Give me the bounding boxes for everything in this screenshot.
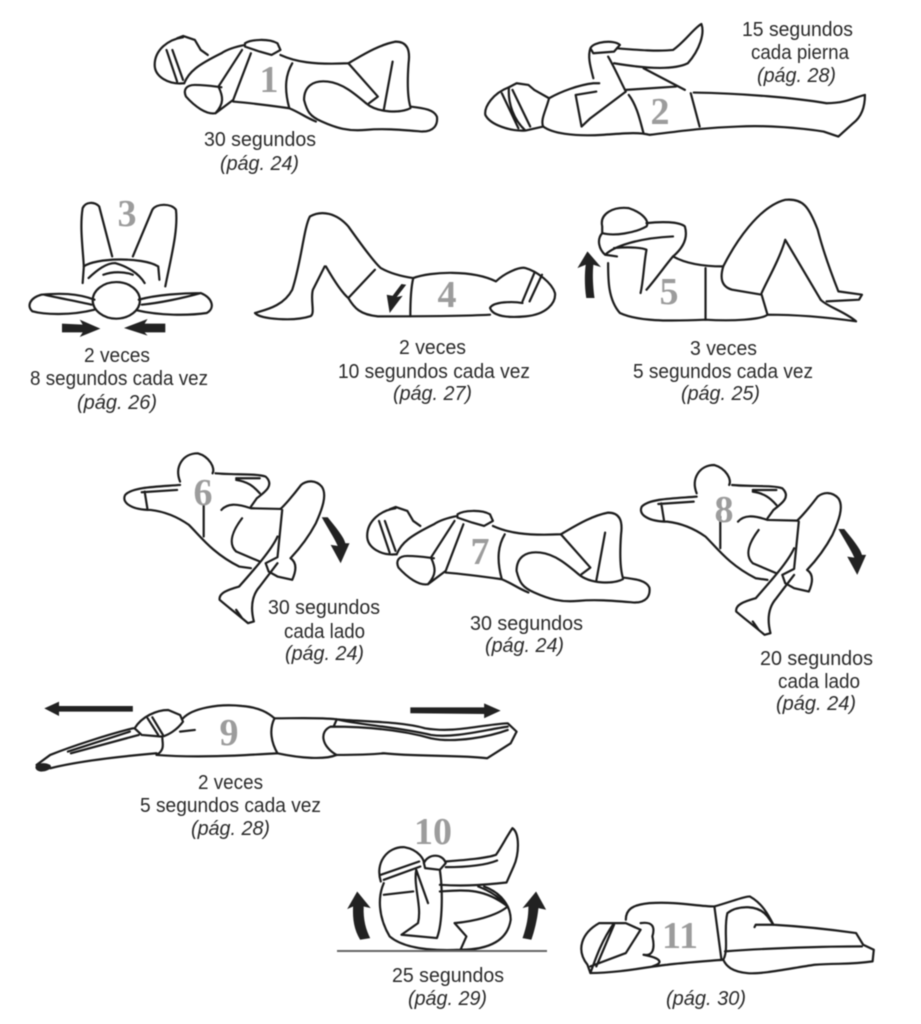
caption 4: 10 segundos cada vez	[338, 360, 530, 383]
arrows: rocking up	[347, 891, 546, 940]
panel: exercise 9	[35, 702, 517, 840]
caption 10	[392, 964, 504, 1010]
figure: person lying with arms on chest and knees bent	[155, 36, 437, 132]
panel: exercise 7	[367, 507, 650, 657]
number 9: 9	[220, 712, 238, 754]
caption 9	[140, 771, 321, 840]
caption 1: (pág. 24)	[220, 152, 299, 175]
caption 10: 25 segundos	[392, 964, 504, 987]
caption 7: 30 segundos	[470, 612, 583, 635]
panel: exercise 3	[30, 193, 212, 414]
caption 3: 2 veces	[84, 344, 150, 367]
figure: person lying with knees bent	[255, 213, 555, 319]
caption 2	[742, 18, 853, 87]
arrow: upward curl	[577, 251, 601, 298]
caption 5: 5 segundos cada vez	[633, 360, 813, 383]
panel: exercise 11	[581, 896, 874, 1010]
caption 5	[633, 337, 813, 405]
caption 4: (pág. 27)	[393, 382, 472, 405]
caption 9: 2 veces	[198, 771, 263, 794]
number 1: 1	[260, 59, 278, 101]
number 11: 11	[662, 915, 698, 957]
number 2: 2	[650, 91, 670, 133]
caption 11: (pág. 30)	[666, 987, 746, 1010]
figure: person lying with arms on chest and knees bent	[367, 507, 650, 603]
ground line	[337, 950, 547, 952]
number 3: 3	[118, 193, 136, 235]
caption 4	[338, 336, 530, 405]
caption 3: 8 segundos cada vez	[30, 367, 208, 390]
panel: exercise 10	[337, 811, 547, 1010]
caption 5: 3 veces	[690, 337, 757, 360]
panel: exercise 5	[577, 200, 862, 405]
caption 6	[268, 596, 380, 665]
caption 3	[30, 344, 208, 414]
caption 7	[470, 612, 583, 657]
caption 9: (pág. 28)	[191, 817, 270, 840]
figure: person with crossed leg twist	[641, 465, 841, 635]
caption 6: 30 segundos	[268, 596, 380, 619]
figure: person seen from head end, hands behind head	[30, 203, 212, 319]
caption 7: (pág. 24)	[485, 634, 564, 657]
caption 10: (pág. 29)	[408, 987, 487, 1010]
figure: person curling up with hands behind head	[599, 200, 862, 321]
caption 9: 5 segundos cada vez	[140, 794, 321, 817]
panel: exercise 1	[155, 36, 437, 175]
caption 6: (pág. 24)	[285, 642, 364, 665]
panel: exercise 4	[255, 213, 555, 405]
number 6: 6	[194, 472, 212, 514]
caption 2: (pág. 28)	[757, 64, 836, 87]
caption 2: 15 segundos	[742, 18, 853, 41]
figure: person lying pulling one leg up	[485, 24, 865, 137]
caption 8: 20 segundos	[760, 647, 873, 670]
caption 2: cada pierna	[751, 41, 850, 64]
figure: person curled up holding legs	[379, 828, 518, 950]
caption 8: (pág. 24)	[776, 692, 856, 715]
number 8: 8	[714, 489, 734, 531]
figure: person with crossed leg twist	[124, 453, 324, 623]
figure: person stretched out with arms overhead	[37, 705, 517, 768]
panel: exercise 6	[124, 453, 380, 665]
caption 8: cada lado	[778, 670, 860, 693]
caption 4: 2 veces	[399, 336, 466, 359]
arrows: inward pressing	[62, 319, 165, 337]
number 4: 4	[438, 274, 456, 316]
panel: exercise 2	[485, 18, 865, 137]
caption 3: (pág. 26)	[77, 391, 157, 414]
arrows: stretch left and right	[35, 702, 501, 772]
number 7: 7	[470, 531, 490, 573]
number 5: 5	[660, 271, 678, 313]
caption 8	[760, 647, 873, 715]
arrow: leg down	[838, 529, 866, 575]
caption 5: (pág. 25)	[681, 382, 760, 405]
caption 1	[204, 128, 316, 175]
caption 6: cada lado	[284, 620, 365, 643]
caption 1: 30 segundos	[204, 128, 316, 151]
arrow: leg down	[322, 517, 350, 563]
arrow: pelvis down	[387, 284, 406, 313]
figure: person lying on side	[581, 896, 874, 973]
panel: exercise 8	[641, 465, 873, 715]
number 10: 10	[414, 811, 452, 853]
